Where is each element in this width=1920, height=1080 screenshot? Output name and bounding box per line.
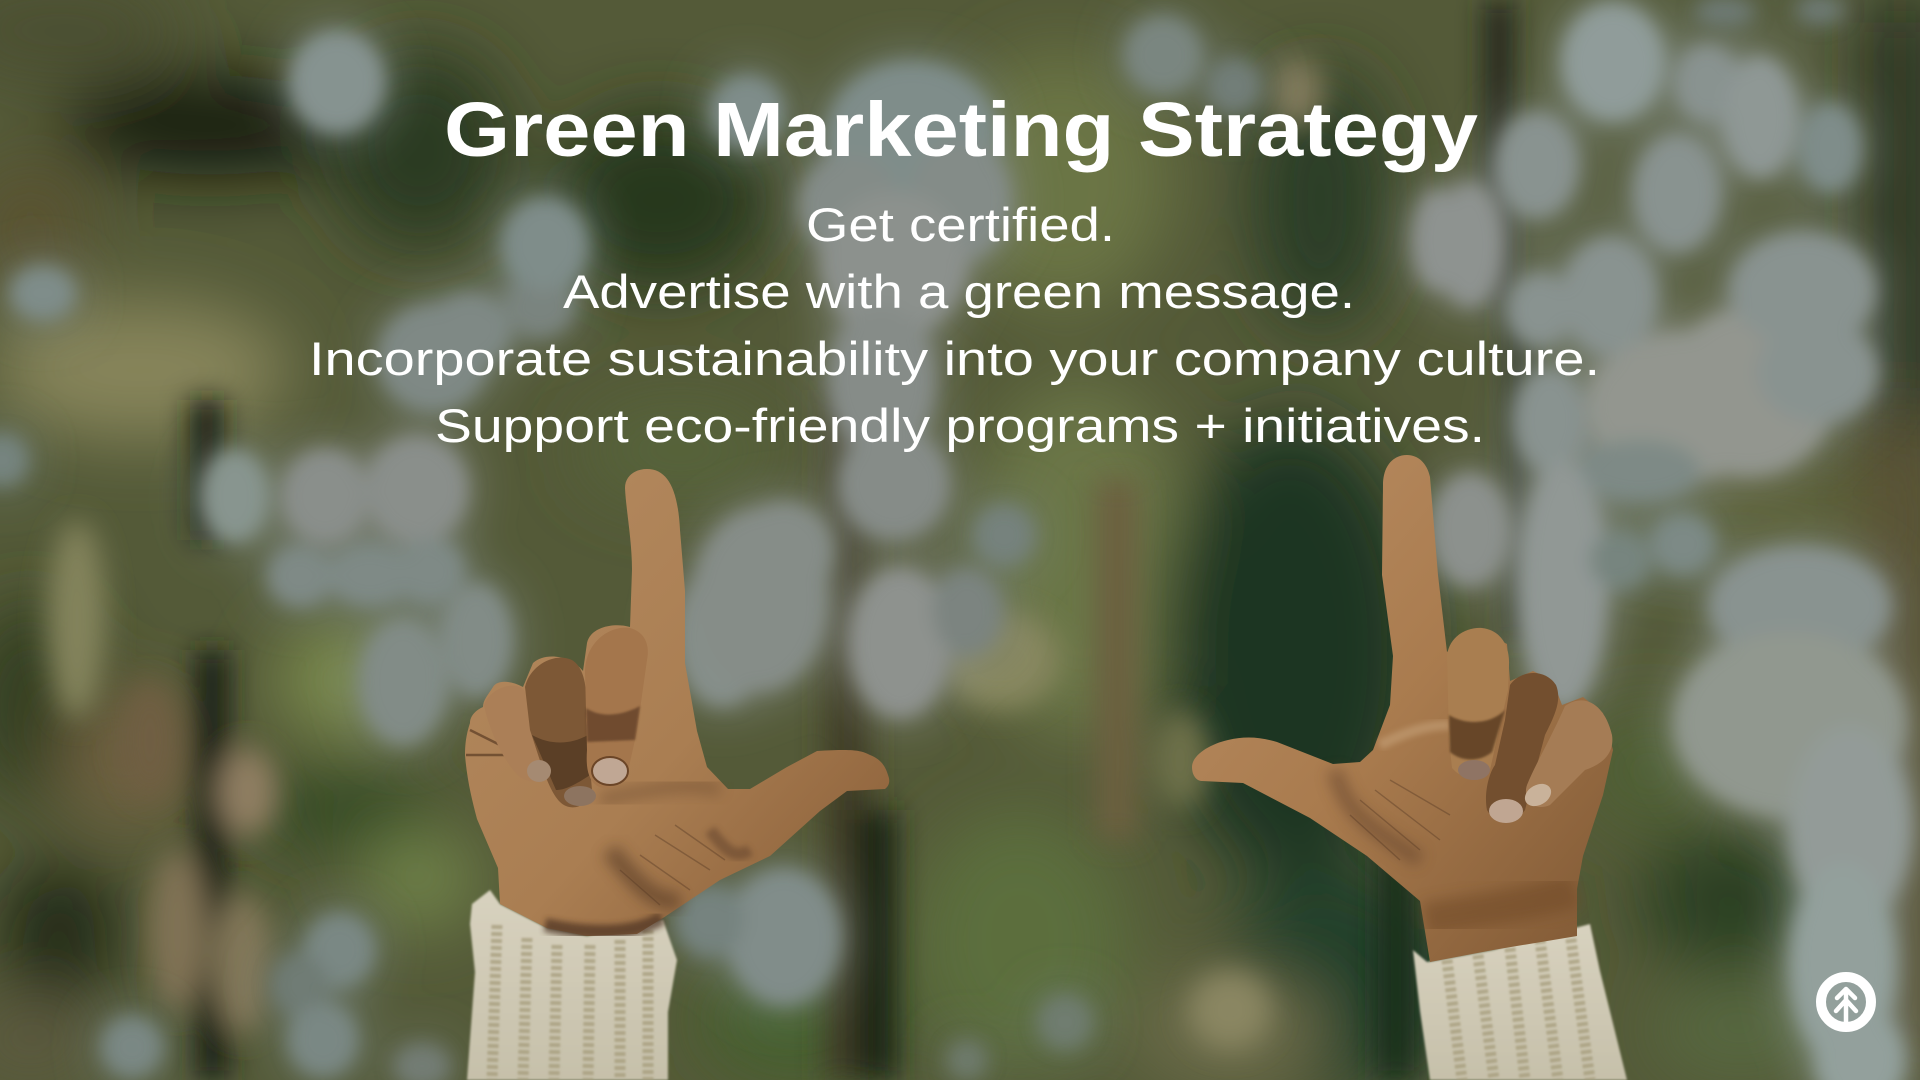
- strategy list: Advertise with a green message.: [563, 265, 1355, 318]
- right hand: [1192, 455, 1613, 962]
- left hand: [465, 469, 889, 936]
- strategy list: [309, 198, 1600, 452]
- middle bokeh highlights: [0, 17, 1261, 1080]
- left nails: [527, 757, 628, 806]
- right nails: [1458, 760, 1555, 823]
- icon: tree logo badge: [1821, 977, 1871, 1027]
- strategy list: Get certified.: [806, 198, 1115, 251]
- title: Green Marketing Strategy: [444, 87, 1478, 173]
- left hand palm shading: [466, 535, 750, 932]
- right sweater cuff: [1413, 924, 1627, 1080]
- right hand palm shading: [1335, 520, 1575, 920]
- strategy list: Support eco-friendly programs + initiatives.: [435, 399, 1485, 452]
- strategy list: Incorporate sustainability into your company culture.: [309, 332, 1600, 385]
- left sweater cuff: [467, 890, 677, 1080]
- right curled fingers: [1447, 628, 1612, 823]
- left curled fingers: [484, 628, 648, 807]
- right bokeh highlights: [1414, 0, 1910, 1080]
